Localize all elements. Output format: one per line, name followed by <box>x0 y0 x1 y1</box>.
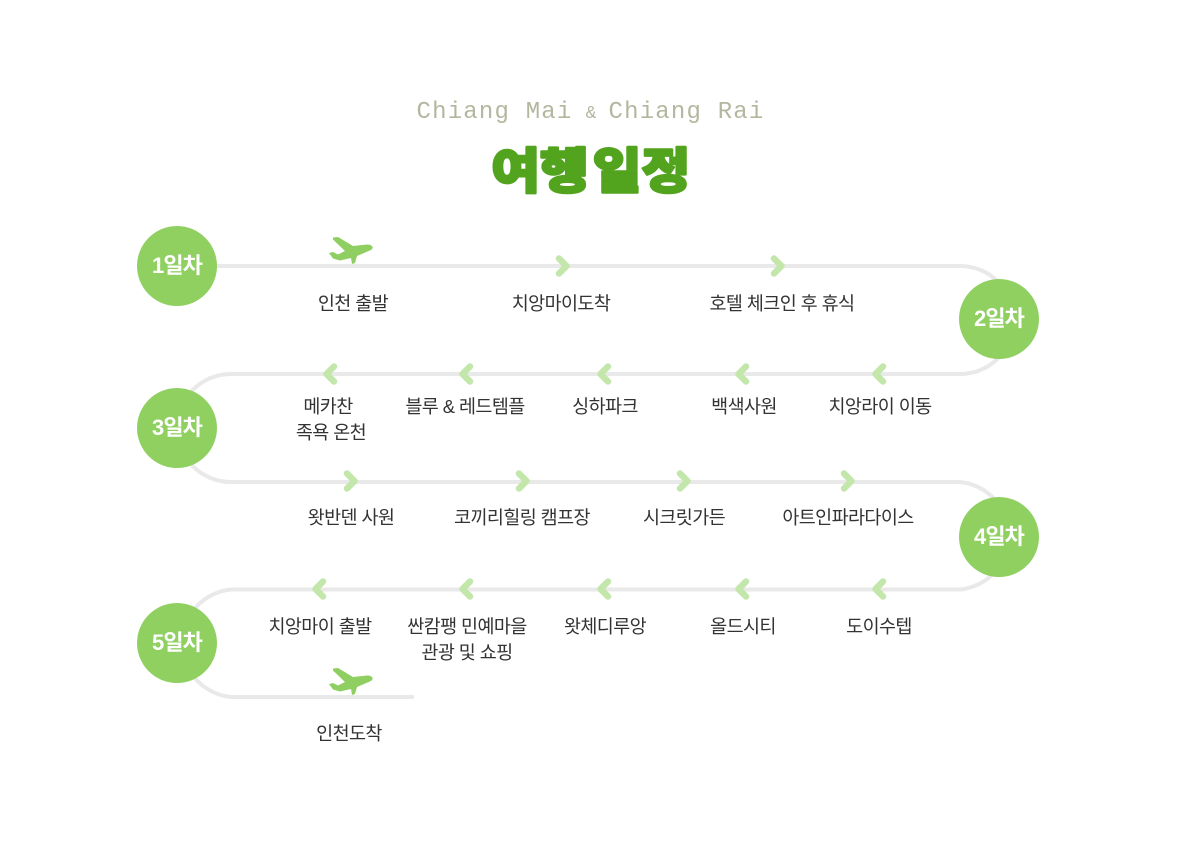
arrows: row 4 <box>316 582 883 596</box>
labels: day 2: 치앙라이 이동 <box>828 396 932 417</box>
day 4 marker: 4일차 <box>974 524 1025 549</box>
labels: day 4: 치앙마이 출발 <box>268 616 372 637</box>
day 5 marker: 5일차 <box>152 630 203 655</box>
labels: day 4 <box>268 616 912 663</box>
route line <box>177 266 1014 697</box>
labels: day 3 <box>308 507 914 528</box>
labels: day 3: 아트인파라다이스 <box>782 507 914 528</box>
labels: day 1 <box>318 293 854 314</box>
icon: plane arrival <box>329 668 373 695</box>
day 2 marker: 2일차 <box>974 306 1025 331</box>
title <box>491 144 690 199</box>
labels: day 4: 싼캄팽 민예마을 <box>407 616 527 637</box>
day 3 marker <box>137 388 217 468</box>
labels: day 2: 블루 & 레드템플 <box>405 396 525 417</box>
day 1 marker <box>137 226 217 306</box>
labels: day 4: 관광 및 쇼핑 <box>421 642 513 663</box>
arrows: row 2 <box>326 366 883 382</box>
day 2 marker <box>959 279 1039 359</box>
day 1 marker: 1일차 <box>152 253 203 278</box>
labels: day 4: 도이수텝 <box>846 616 912 637</box>
day 5 marker <box>137 603 217 683</box>
labels: day 2: 싱하파크 <box>572 396 638 417</box>
arrows: row 3 <box>347 474 852 488</box>
labels: day 3: 왓반덴 사원 <box>308 507 394 528</box>
labels: day 1: 치앙마이도착 <box>512 293 611 314</box>
labels: day 2: 메카찬 <box>303 396 353 417</box>
labels: day 2 <box>296 396 932 443</box>
labels: day 4: 올드시티 <box>710 616 776 637</box>
labels: day 1: 호텔 체크인 후 휴식 <box>710 293 854 314</box>
labels: day 3: 코끼리힐링 캠프장 <box>454 507 591 528</box>
title: 일정 <box>593 144 690 199</box>
arrows: row 1 <box>559 258 782 274</box>
icon: plane departure <box>329 237 373 264</box>
labels: day 4: 왓체디루앙 <box>564 616 647 637</box>
day 3 marker: 3일차 <box>152 415 203 440</box>
labels: day 3: 시크릿가든 <box>643 507 726 528</box>
labels: day 2: 족욕 온천 <box>296 422 366 443</box>
subtitle <box>416 99 765 126</box>
day 4 marker <box>959 497 1039 577</box>
labels: day 2: 백색사원 <box>711 396 777 417</box>
subtitle: & <box>586 104 597 124</box>
subtitle: Chiang Rai <box>608 99 765 126</box>
subtitle: Chiang Mai <box>416 99 573 126</box>
labels: day 1: 인천 출발 <box>318 293 389 314</box>
title: 여행 <box>491 144 589 199</box>
label: arrival: 인천도착 <box>316 723 382 744</box>
